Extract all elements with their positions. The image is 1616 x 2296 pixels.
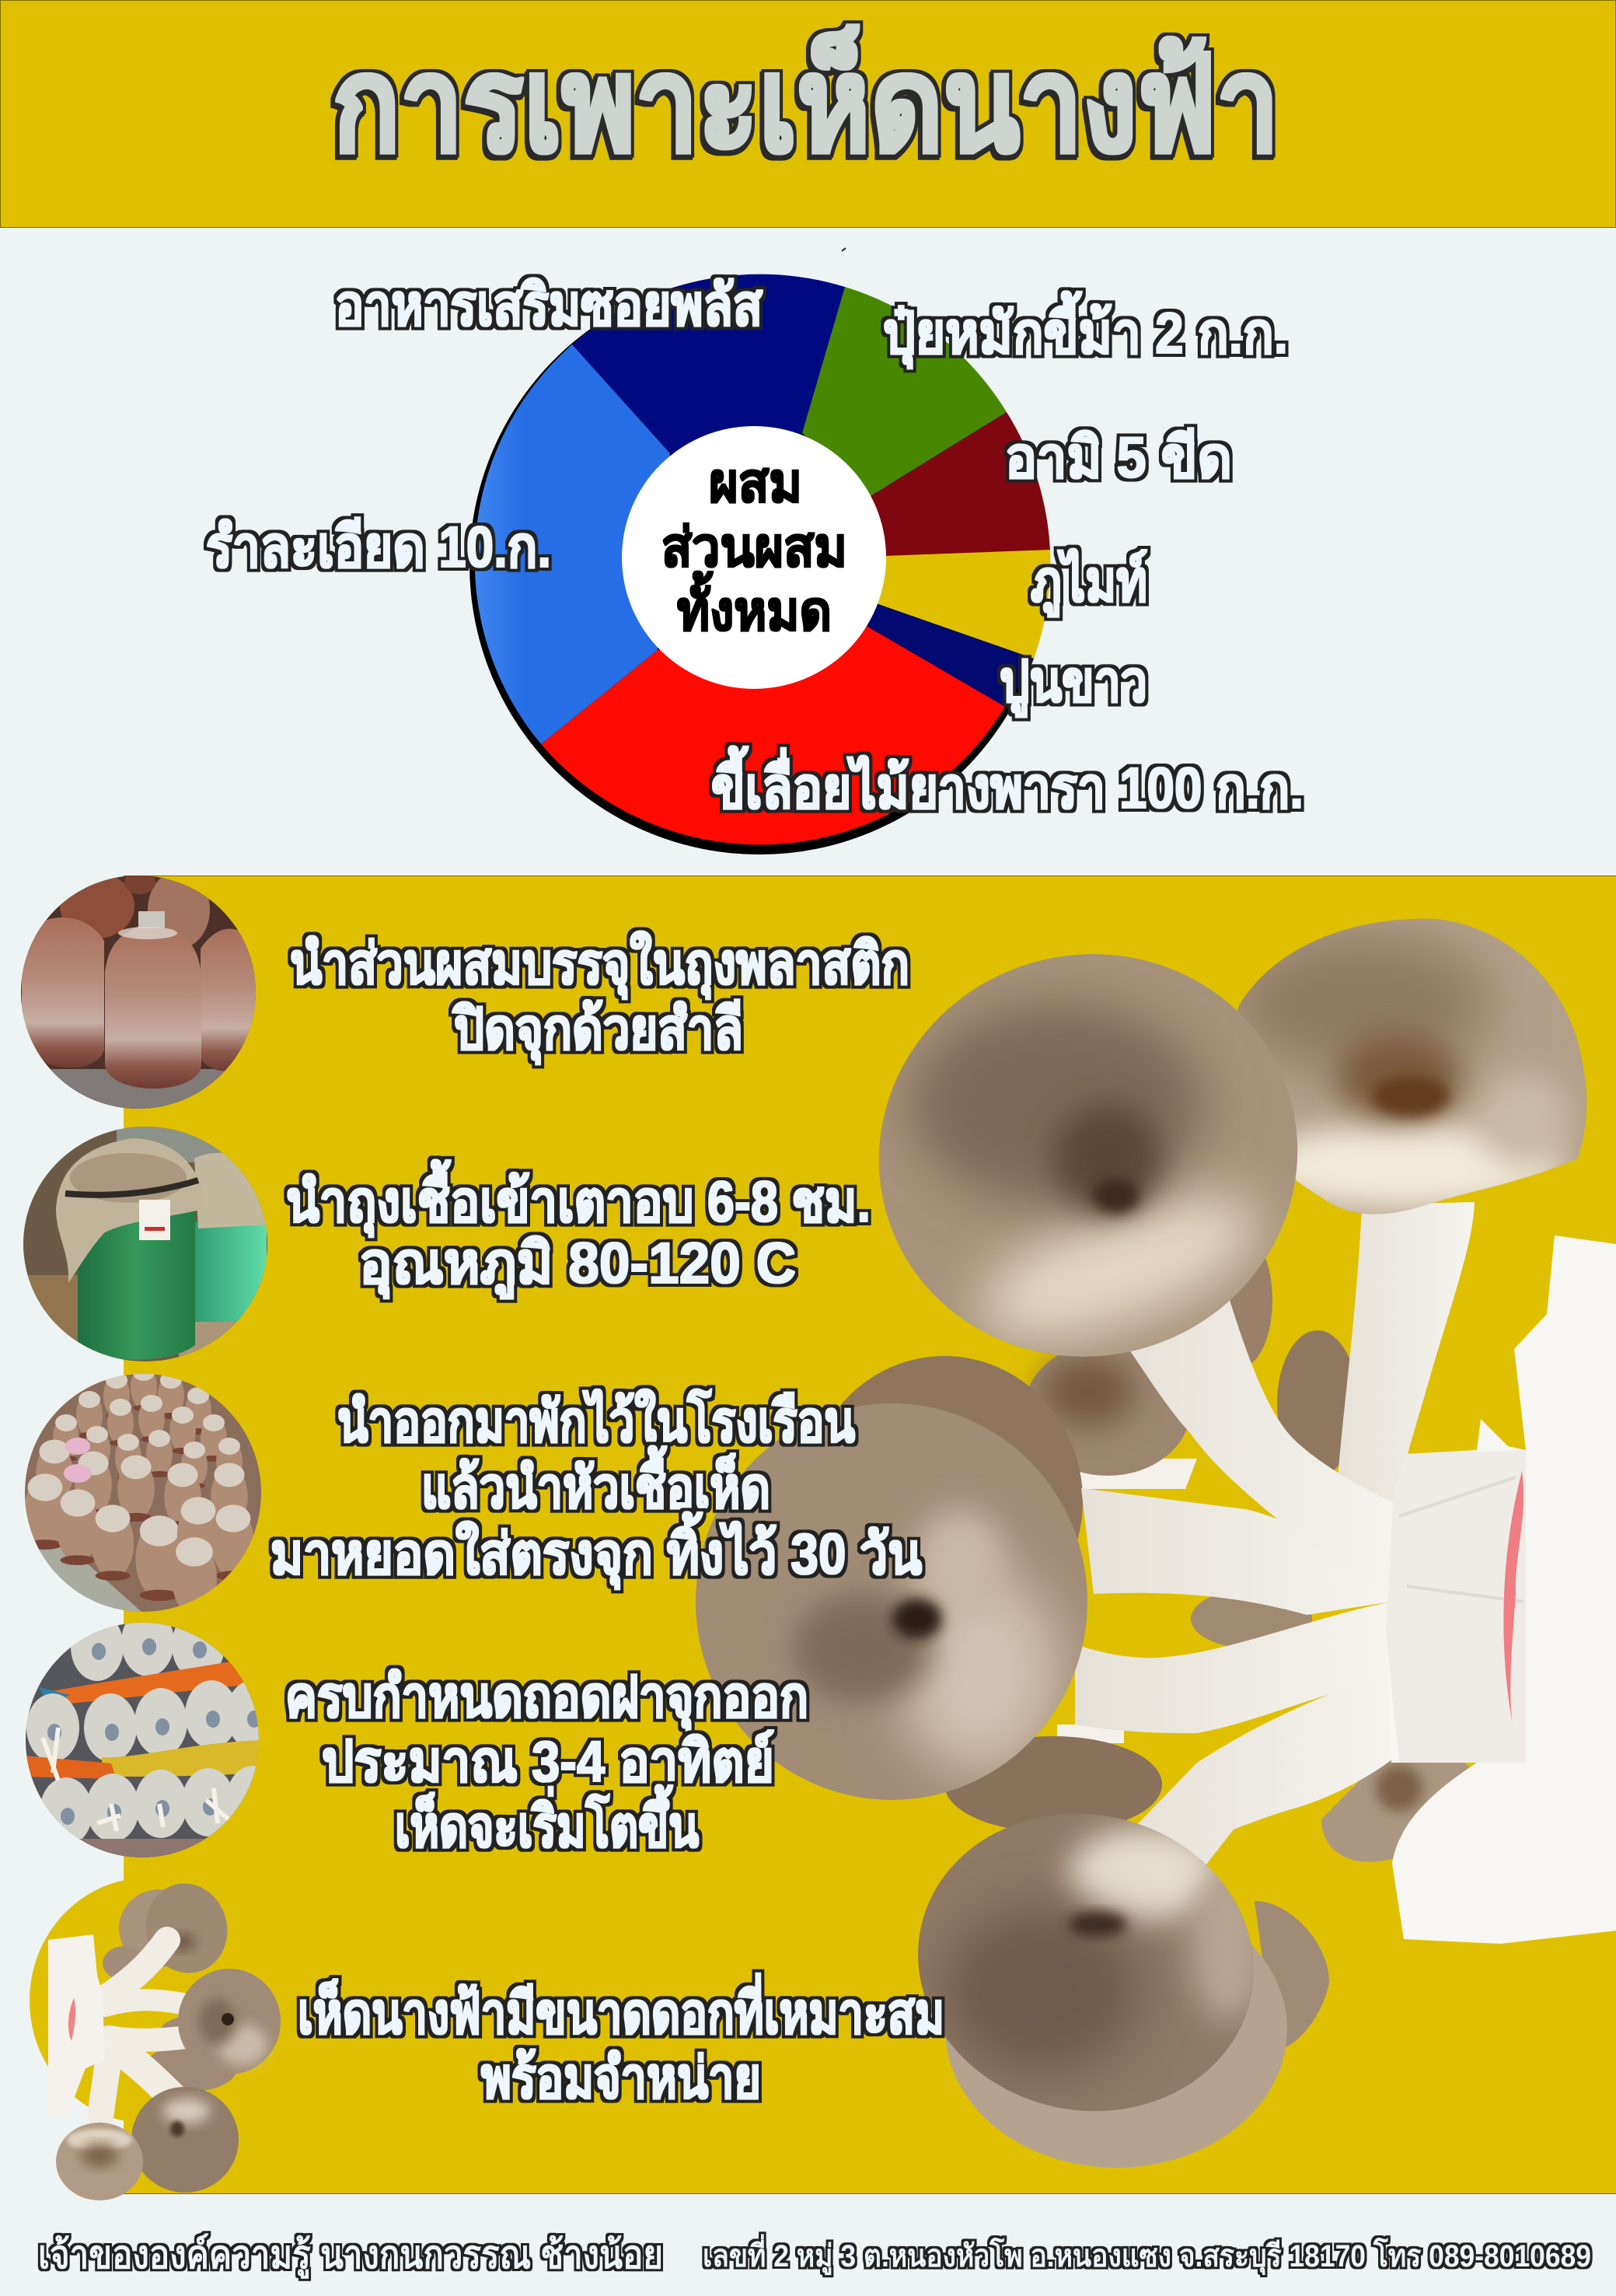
small caps front [178, 1969, 281, 2074]
cap: top left large [878, 954, 1298, 1357]
pie centre text: ทั้งหมด [677, 571, 832, 641]
step 3 text: แล้วนำหัวเชื้อเห็ด [421, 1445, 770, 1520]
small stray mark [842, 248, 846, 251]
slice: amino [871, 412, 1050, 556]
photo 2: steaming drums [19, 1124, 272, 1365]
step 3 text: มาหยอดใส่ตรงจุก ทิ้งไว้ 30 วัน [270, 1511, 922, 1590]
pie centre text: ผสม [709, 453, 802, 513]
footer: knowledge owner: เจ้าขององค์ความรู้ นางกนกวรรณ ช้างน้อย [38, 2233, 663, 2279]
step 4 text: ประมาณ 3-4 อาทิตย์ [322, 1729, 774, 1794]
slice: sawdust [541, 624, 1005, 844]
label: supplement: อาหารเสริมซอยพลัส [335, 273, 763, 337]
photo 3: rows of spawn bags [25, 1374, 261, 1612]
photo 4: bags with mushrooms sprouting [19, 1608, 279, 1866]
step 5 text: เห็ดนางฟ้ามีขนาดดอกที่เหมาะสม [298, 1973, 944, 2046]
step 1 text [290, 930, 909, 1065]
step 5 text: พร้อมจำหน่าย [481, 2046, 761, 2110]
pie centre text [661, 453, 847, 641]
label: sawdust: ขี้เลื่อยไม้ยางพารา 100 ก.ก. [711, 746, 1304, 820]
pie labels [206, 273, 1304, 820]
title: การเพาะเห็ดนางฟ้า [333, 24, 1279, 180]
step 2 text: นำถุงเชื้อเข้าเตาอบ 6-8 ชม. [286, 1159, 871, 1238]
pie centre text: ส่วนผสม [661, 517, 847, 578]
cap: top right [1228, 919, 1586, 1214]
slice: horse manure [802, 287, 1007, 496]
step 4 text [285, 1665, 808, 1859]
small mushroom bag [48, 1934, 105, 2119]
cultivation bag [1386, 1235, 1616, 1944]
small mushroom stems [99, 1940, 187, 2134]
step 4 text: เห็ดจะเริ่มโตขึ้น [395, 1784, 699, 1859]
step 3 text: นำออกมาพักไว้ในโรงเรือน [337, 1388, 855, 1454]
slice: supplement [572, 274, 845, 453]
stems [1075, 1202, 1475, 1876]
label: lime: ปูนขาว [1000, 649, 1147, 718]
photo 1: plastic bags of mixture [16, 871, 264, 1112]
small mushroom illustration: final product [48, 1875, 281, 2200]
step 4 text: ครบกำหนดถอดฝาจุกออก [285, 1665, 808, 1733]
label: pumice: ภูไมท์ [1031, 547, 1147, 617]
slice: pumice [876, 550, 1050, 659]
step 1 text: ปิดจุกด้วยสำลี [452, 997, 743, 1065]
yellow process panel [30, 875, 1616, 2194]
step 2 text [286, 1159, 871, 1299]
white slivers behind caps [1057, 1459, 1197, 1743]
step 3 text [270, 1388, 922, 1590]
step 2 text: อุณหภูมิ 80-120 C [359, 1231, 796, 1299]
step 5 text [298, 1973, 944, 2110]
label: horse manure compost: ปุ๋ยหมักขี้ม้า 2 ก.ก. [883, 291, 1288, 369]
back caps [806, 1233, 1478, 2168]
pie centre circle [622, 426, 886, 689]
cap: middle large [696, 1403, 1087, 1800]
label: amino: อามิ 5 ขีด [1005, 425, 1232, 490]
step 1 text: นำส่วนผสมบรรจุในถุงพลาสติก [290, 930, 909, 1000]
label: rice bran: รำละเอียด 10.ก. [206, 515, 551, 579]
slice: lime [864, 603, 1034, 707]
pie chart: mix ingredients [469, 274, 1050, 854]
header banner [0, 0, 1615, 227]
cap: bottom large [918, 1814, 1254, 2112]
slice: rice bran [475, 344, 670, 744]
large oyster mushroom illustration [696, 907, 1616, 2168]
